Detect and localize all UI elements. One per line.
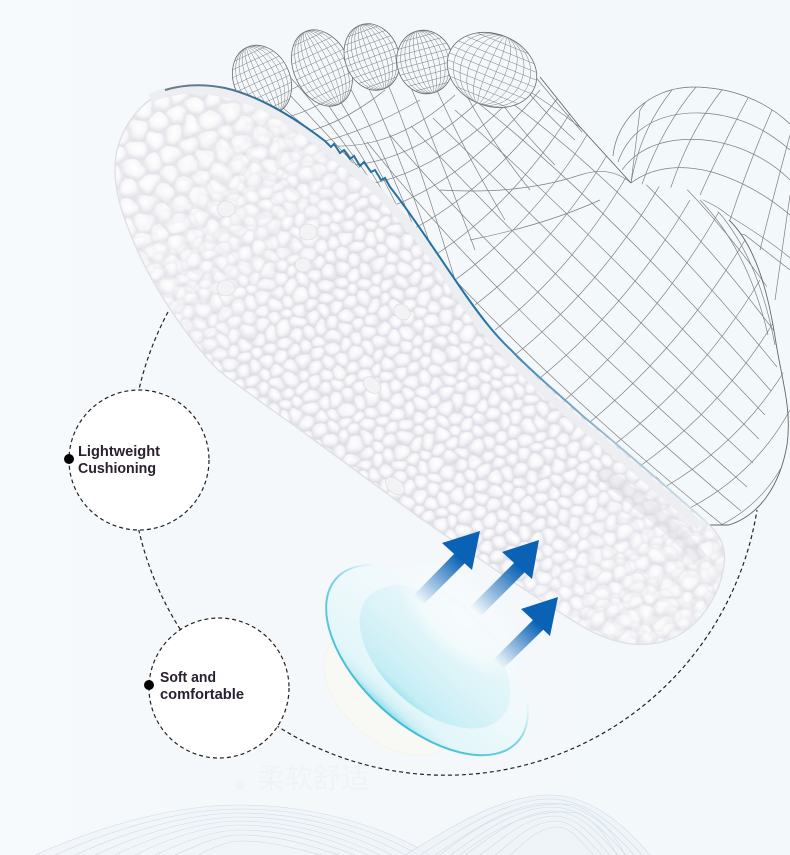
badge circle [69, 390, 209, 530]
foot body mesh [284, 78, 790, 524]
badge label: comfortable [160, 687, 244, 703]
badge label: Cushioning [78, 461, 156, 477]
large cell texture [116, 94, 724, 643]
badge label [78, 444, 160, 477]
arrow 3 [493, 597, 558, 669]
translucent lens disc [292, 529, 562, 791]
badge label: Lightweight [78, 444, 160, 460]
badge circle [149, 618, 289, 758]
inner disc [333, 558, 537, 756]
big toe [436, 19, 548, 121]
small cell texture [150, 122, 723, 642]
feature: soft and comfortable [144, 618, 289, 758]
left wave [35, 805, 430, 855]
dashed connector arc [131, 312, 757, 775]
outer disc rim [292, 529, 562, 791]
little toe [221, 36, 303, 124]
ankle wireframe [613, 87, 790, 310]
arrow 2 [470, 540, 539, 617]
badge dot [144, 680, 154, 690]
badge dot [64, 454, 74, 464]
foot outline [540, 77, 631, 183]
right wave [405, 795, 650, 855]
wireframe toes [221, 16, 548, 124]
third toe [335, 16, 409, 98]
blue top edge [165, 85, 704, 520]
fourth toe [280, 20, 364, 116]
outer disc [292, 529, 562, 791]
wireframe foot [284, 76, 790, 526]
heel shading [600, 470, 700, 560]
arrow 1 [412, 531, 480, 606]
second toe [390, 24, 460, 100]
faint background wave lines [35, 795, 650, 855]
insole [100, 70, 740, 660]
rim highlight [150, 89, 700, 526]
perforated dimples [217, 201, 413, 498]
feature: lightweight cushioning [64, 390, 209, 530]
faint ghost caption: 柔软舒适 [257, 763, 369, 794]
upward arrows [412, 531, 558, 669]
insole body [116, 94, 724, 644]
back pale disc [300, 604, 484, 780]
badge label [160, 670, 244, 703]
disc glare [376, 535, 548, 701]
badge label: Soft and [160, 670, 216, 686]
insole outline [115, 85, 725, 644]
